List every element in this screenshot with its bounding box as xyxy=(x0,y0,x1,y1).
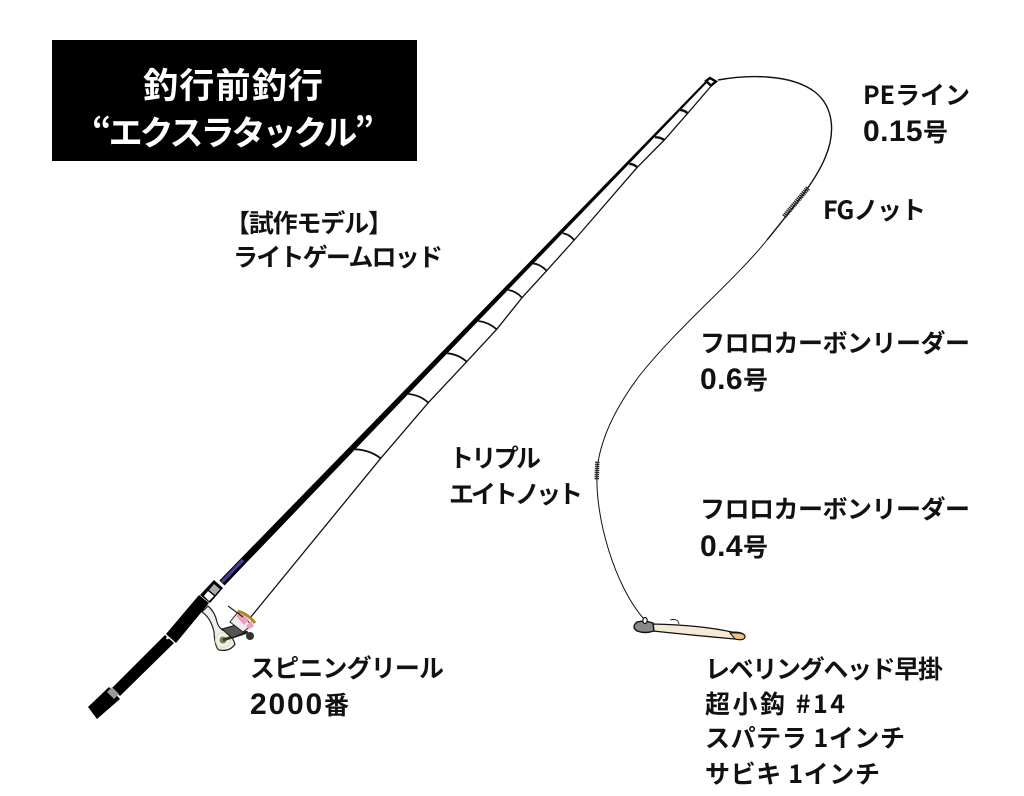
title box xyxy=(52,40,417,161)
label: PE line: PEライン xyxy=(863,76,970,112)
fishing line from reel through guides to tip xyxy=(250,85,712,618)
handle disc xyxy=(216,632,230,648)
label: spinning reel: 2000番 xyxy=(250,686,349,722)
label: leader 0.4: フロロカーボンリーダー xyxy=(700,490,970,526)
label: triple eight knot xyxy=(449,439,583,511)
label: rig details: 超小鈎 #14 xyxy=(705,685,845,721)
label: PE line: 0.15号 xyxy=(863,113,948,149)
label: rig details xyxy=(705,650,943,791)
rod tip guide xyxy=(706,78,716,86)
label: rig details: レベリングヘッド早掛 xyxy=(705,650,943,686)
grip notch xyxy=(166,637,169,639)
spool xyxy=(230,612,252,632)
hook point xyxy=(670,620,679,624)
label: PE line xyxy=(863,76,970,149)
fluorocarbon leader xyxy=(597,240,767,618)
label: leader 0.4: 0.4号 xyxy=(700,528,768,564)
reel foot and body xyxy=(202,606,235,650)
label: FG knot: FGノット xyxy=(823,191,926,227)
label: spinning reel: スピニングリール xyxy=(250,649,444,685)
jighead xyxy=(634,621,654,632)
rod blank xyxy=(219,77,711,586)
fishing rod xyxy=(88,77,716,719)
title box: “エクスラタックル” xyxy=(92,106,374,155)
label: rig details: スパテラ 1インチ xyxy=(705,719,905,755)
title box: 釣行前釣行 xyxy=(143,58,323,109)
spinning reel xyxy=(202,606,255,650)
FG knot xyxy=(784,188,808,217)
jighead and soft lure xyxy=(634,618,745,640)
butt section xyxy=(88,687,120,719)
label: spinning reel xyxy=(250,649,444,722)
label: leader 0.6: フロロカーボンリーダー xyxy=(700,324,970,360)
foregrip xyxy=(166,595,209,643)
winding check and reel seat xyxy=(200,580,223,603)
label: rig details: サビキ 1インチ xyxy=(705,755,880,791)
label: rod: 【試作モデル】 xyxy=(225,204,393,240)
rod blank purple section xyxy=(222,560,243,582)
rod guides xyxy=(355,110,688,458)
PE line upper curve xyxy=(718,77,832,240)
rear grip xyxy=(112,635,174,696)
label: leader 0.6: 0.6号 xyxy=(700,361,768,397)
label: leader 0.4 xyxy=(700,490,970,564)
label: rod xyxy=(225,204,443,274)
label: leader 0.6 xyxy=(700,324,970,397)
label: triple eight knot: エイトノット xyxy=(449,475,583,511)
label: triple eight knot: トリプル xyxy=(449,439,541,475)
triple eight knot xyxy=(594,462,600,480)
label: rod: ライトゲームロッド xyxy=(233,238,443,274)
